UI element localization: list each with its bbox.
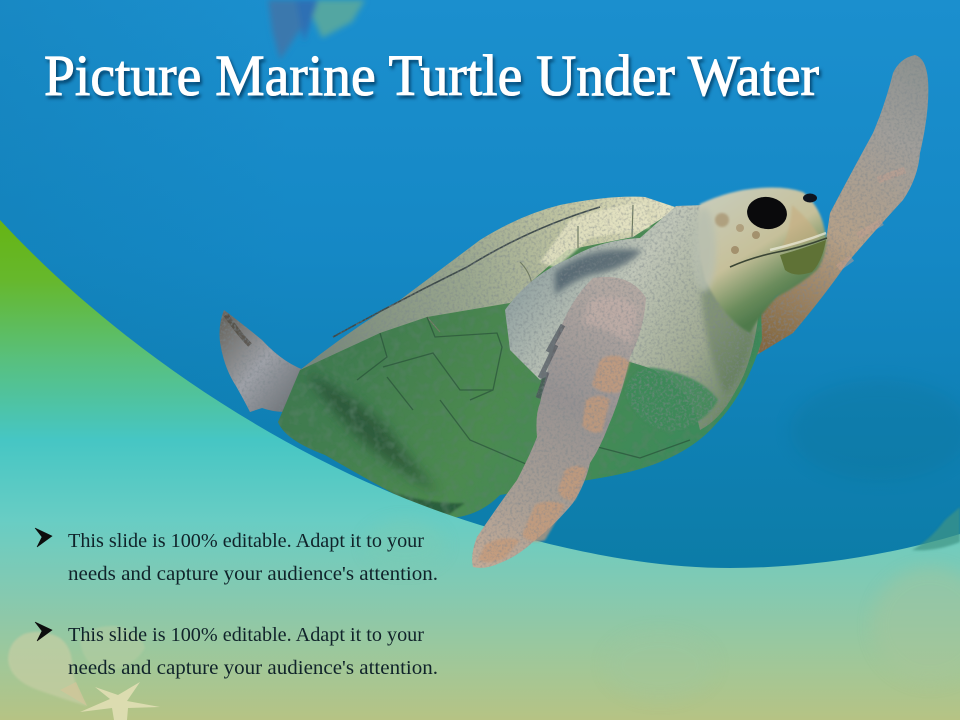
turtle: shell scutes bbox=[357, 317, 690, 470]
seashells and starfish lower left bbox=[8, 626, 160, 720]
turtle: neck and shoulder skin bbox=[505, 205, 760, 432]
bullet item 1 bbox=[35, 528, 438, 585]
bullet item 2 bbox=[35, 622, 438, 679]
turtle: pale carapace bbox=[300, 197, 678, 370]
bullet item 1: needs and capture your audience's attention. bbox=[68, 563, 438, 585]
bullet item 2: needs and capture your audience's attention. bbox=[68, 657, 438, 679]
mouth line bbox=[730, 238, 827, 267]
turtle: front flipper bbox=[472, 277, 646, 568]
turtle: hind flipper bbox=[220, 310, 330, 412]
wave panel bbox=[0, 220, 960, 720]
eye bbox=[745, 194, 789, 232]
faded shells and coral lower right bbox=[365, 507, 960, 700]
bullet item 2: This slide is 100% editable. Adapt it to your bbox=[68, 624, 424, 646]
lower jaw bbox=[780, 240, 826, 275]
turtle: head bbox=[692, 188, 827, 333]
turtle: shell underside bbox=[278, 205, 762, 518]
turtle: far flipper bbox=[745, 55, 928, 362]
bullet list bbox=[35, 528, 438, 679]
bullet item 1: This slide is 100% editable. Adapt it to your bbox=[68, 530, 424, 552]
blurred fish at top bbox=[268, 0, 365, 60]
title: Picture Marine Turtle Under Water bbox=[44, 43, 819, 108]
nostril bbox=[803, 194, 817, 202]
